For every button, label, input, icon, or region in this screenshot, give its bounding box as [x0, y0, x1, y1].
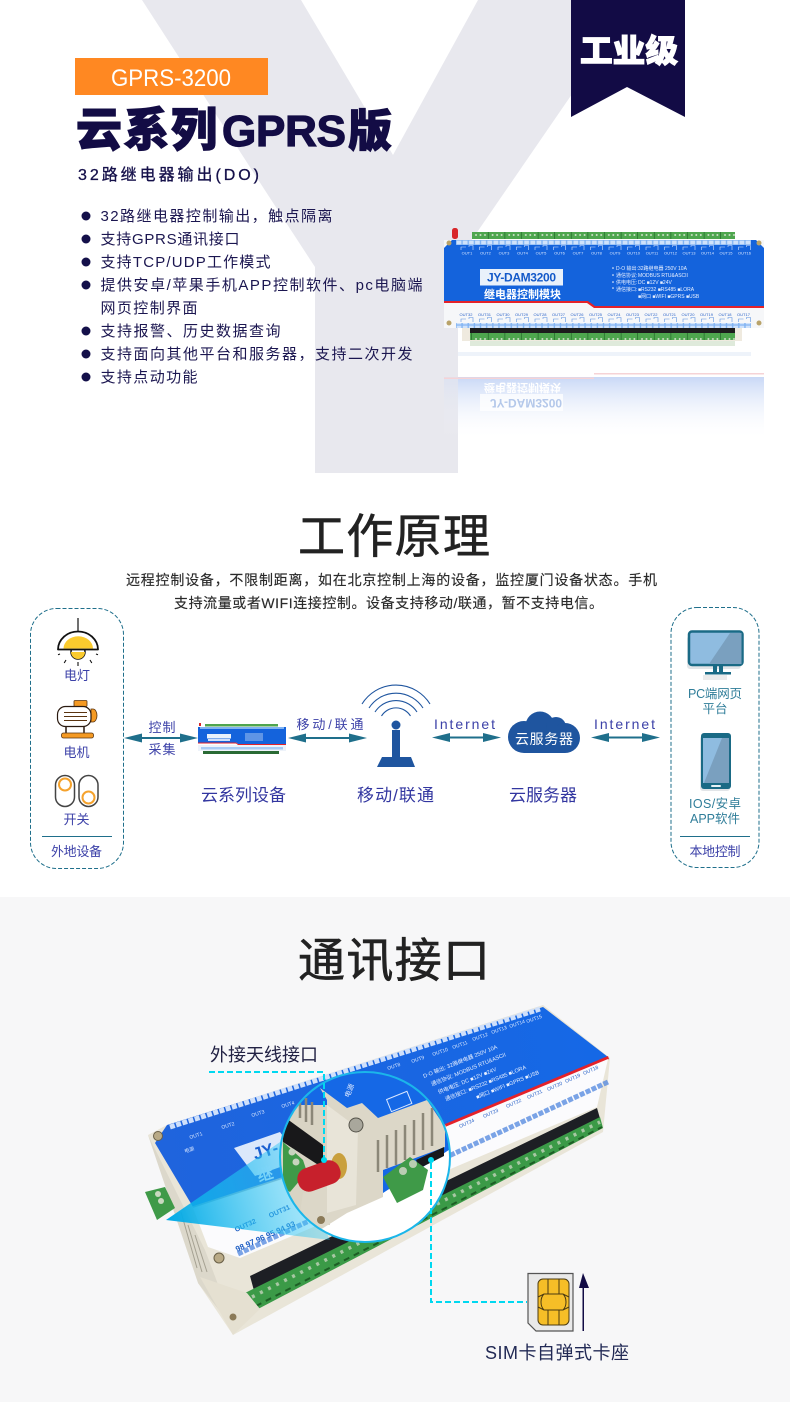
section intro text	[126, 572, 657, 611]
icon: signal tower	[362, 685, 430, 767]
blue top face	[155, 1007, 608, 1207]
section intro text: 支持流量或者WIFI连接控制。设备支持移动/联通，暂不支持电信。	[174, 595, 603, 611]
feature list: 支持报警、历史数据查询	[100, 323, 280, 340]
specification text: D·O 输出:	[616, 265, 638, 272]
name plate: JY-DAM3200	[487, 270, 556, 284]
bottom outputs: OUT32	[460, 312, 473, 317]
bottom outputs	[460, 312, 751, 317]
outputs and spec text: OUT9	[411, 1055, 425, 1065]
name plate	[480, 269, 563, 301]
arrow: control and collect: 控制	[148, 720, 176, 735]
bottom outputs: OUT17	[737, 312, 751, 317]
panel: communication interfaces	[145, 936, 628, 1360]
bottom outputs: OUT24	[608, 312, 621, 317]
mini device image	[198, 723, 286, 754]
outputs and spec text: OUT23	[482, 1108, 500, 1120]
ribbon badge: industrial grade	[571, 0, 685, 117]
outputs and spec text: OUT32	[234, 1218, 258, 1234]
panel caption: 外地设备	[51, 844, 102, 859]
icon: motor	[58, 700, 97, 738]
top outputs: OUT2	[480, 250, 492, 256]
arrow: internet link to clients	[591, 716, 660, 742]
title: 云系列	[76, 104, 217, 156]
bottom outputs: OUT25	[589, 312, 603, 317]
green terminal row	[245, 1117, 603, 1309]
arrow: up	[579, 1273, 589, 1331]
model tag	[75, 58, 268, 95]
outputs and spec text: OUT21	[526, 1089, 544, 1101]
icon: cloud server	[508, 712, 580, 753]
panel: remote devices	[30, 608, 124, 868]
icon: monitor	[687, 632, 742, 680]
top outputs: OUT6	[554, 250, 566, 256]
magnifier lens detail: 电源	[343, 1082, 356, 1099]
feature list: 支持点动功能	[100, 369, 198, 386]
feature list: 支持TCP/UDP工作模式	[100, 254, 270, 271]
feature list: 网页控制界面	[100, 300, 198, 317]
outputs and spec text: 98 97 96 95 94 93	[234, 1219, 297, 1254]
front flange	[200, 1277, 260, 1335]
top outputs: OUT5	[536, 250, 547, 256]
label: PC web platform: 平台	[702, 701, 728, 716]
product reflection: 继电器控制模块	[484, 381, 561, 395]
label: switch: 开关	[63, 812, 90, 827]
outputs and spec text: OUT4	[281, 1100, 296, 1110]
outputs and spec text: OUT18	[582, 1065, 600, 1077]
arrow: mobile/unicom link: 移动/联通	[296, 717, 364, 732]
specification text: MODBUS RTU&ASCII	[638, 273, 688, 279]
top terminal strip	[472, 232, 735, 239]
outputs and spec text: OUT19	[564, 1073, 582, 1085]
label: motor: 电机	[63, 745, 90, 760]
specification text: 32路继电器 250V 10A	[638, 265, 688, 272]
green connector on side	[145, 1187, 175, 1220]
bottom outputs: OUT26	[571, 312, 584, 317]
specification text: 供电电压:	[616, 279, 637, 286]
specification text	[612, 265, 700, 300]
arrow: control and collect	[124, 720, 198, 757]
feature list	[82, 208, 422, 386]
top outputs: OUT11	[646, 250, 659, 256]
icon: phone	[700, 733, 731, 791]
feature list: 支持面向其他平台和服务器，支持二次开发	[100, 346, 412, 363]
bottom outputs: OUT27	[552, 312, 566, 317]
antenna	[452, 228, 458, 239]
side power labels: 电源	[184, 1145, 195, 1155]
arrow: internet link to cloud: Internet	[434, 716, 495, 732]
feature list: 支持GPRS通讯接口	[100, 231, 240, 248]
outputs and spec text: 通信接口: ■RS232 ■RS485 ■LORA	[444, 1063, 527, 1103]
bottom outputs: OUT21	[663, 312, 677, 317]
magnifier lens detail	[280, 1072, 452, 1242]
icon: SIM card	[528, 1274, 573, 1331]
ribbon badge: industrial grade: 工业级	[580, 33, 678, 69]
callout: antenna interface: 外接天线接口	[210, 1045, 318, 1065]
callout: SIM slot	[428, 1157, 629, 1363]
top outputs: OUT15	[720, 250, 733, 256]
outputs and spec text: OUT8	[387, 1062, 401, 1072]
top outputs: OUT8	[591, 250, 603, 256]
left side with vents	[148, 1135, 236, 1332]
panel: local control	[671, 608, 759, 868]
label: PC web platform: PC端网页	[688, 687, 742, 701]
bottom outputs: OUT30	[497, 312, 510, 317]
decorative letter Y backdrop	[142, 0, 636, 473]
specification text: 通信接口:	[616, 286, 637, 293]
label: iOS/Android app: IOS/安卓	[689, 796, 741, 811]
bottom outputs: OUT31	[478, 312, 492, 317]
module white base	[444, 240, 764, 328]
outputs and spec text: OUT24	[458, 1118, 476, 1130]
bottom outputs: OUT18	[719, 312, 732, 317]
red stripe	[445, 1056, 609, 1127]
callout: antenna interface	[209, 1045, 327, 1163]
label: lamp: 电灯	[64, 668, 90, 683]
lower terminals	[462, 328, 742, 341]
bottom outputs: OUT19	[700, 312, 714, 317]
top outputs: OUT10	[627, 250, 641, 256]
bottom outputs: OUT28	[534, 312, 547, 317]
plate and logo fragment	[234, 1132, 300, 1176]
product photo: relay module front view	[444, 228, 764, 341]
outputs and spec text	[189, 1014, 600, 1254]
product reflection: JY-DAM3200	[490, 396, 562, 410]
product photo: relay module perspective: 继	[255, 1163, 275, 1186]
icon: cloud server: 云服务器	[515, 731, 573, 747]
outputs and spec text: ■网口 ■WIFI ■GPRS ■USB	[475, 1069, 541, 1101]
title	[76, 104, 392, 156]
name plate: 继电器控制模块	[484, 287, 561, 301]
outputs and spec text: OUT11	[452, 1040, 469, 1051]
outputs and spec text: OUT31	[268, 1204, 292, 1220]
caption: cloud series device: 云系列设备	[201, 786, 286, 805]
outputs and spec text: OUT15	[526, 1014, 543, 1025]
caption: cloud server: 云服务器	[509, 786, 577, 805]
outputs and spec text: OUT20	[546, 1081, 564, 1093]
white label strip	[193, 1059, 608, 1258]
top outputs: OUT3	[499, 250, 510, 256]
section heading: interfaces: 通讯接口	[298, 934, 490, 987]
icon: switches	[56, 776, 98, 806]
title: GPRS	[222, 107, 346, 156]
outputs and spec text: OUT10	[432, 1047, 449, 1058]
label: PC web platform	[688, 687, 742, 716]
top outputs: OUT16	[738, 250, 752, 256]
red stripe	[444, 301, 764, 308]
title: 版	[348, 107, 392, 156]
outputs and spec text: 供电电压: DC ■12V ■24V	[437, 1065, 498, 1096]
bottom outputs: OUT20	[682, 312, 695, 317]
subtitle: 32路继电器输出(DO)	[78, 166, 259, 184]
top outputs: OUT12	[664, 250, 678, 256]
specification text: DC ■12V ■24V	[638, 280, 672, 286]
arrow: mobile/unicom link	[288, 717, 367, 742]
outputs and spec text: OUT1	[189, 1131, 204, 1141]
caption: mobile/unicom: 移动/联通	[357, 786, 434, 805]
pin labels	[170, 1009, 540, 1127]
product reflection	[444, 341, 764, 440]
top outputs	[462, 250, 752, 256]
outputs and spec text: OUT22	[505, 1098, 523, 1110]
label: iOS/Android app	[689, 796, 741, 826]
outputs and spec text: D·O 输出: 32路继电器 250V 10A	[422, 1043, 499, 1080]
label: SIM slot: SIM卡自弹式卡座	[485, 1343, 629, 1363]
top outputs: OUT1	[462, 250, 473, 256]
mounting screws	[446, 240, 452, 246]
specification text: ■RS232 ■RS485 ■LORA	[638, 287, 695, 293]
top outputs: OUT14	[701, 250, 715, 256]
outputs and spec text: 通信协议: MODBUS RTU&ASCII	[430, 1050, 507, 1088]
module blue face	[444, 240, 764, 307]
outputs and spec text: OUT3	[251, 1109, 266, 1119]
model tag: GPRS-3200	[111, 65, 231, 92]
outputs and spec text: OUT14	[509, 1019, 526, 1030]
magnifier cone	[166, 1140, 330, 1240]
feature list: 提供安卓/苹果手机APP控制软件、pc电脑端	[100, 277, 422, 294]
recess	[250, 1108, 601, 1298]
top outputs: OUT7	[573, 250, 584, 256]
arrow: internet link to cloud	[432, 716, 501, 742]
top outputs: OUT13	[683, 250, 696, 256]
top outputs: OUT9	[610, 250, 621, 256]
top outputs: OUT4	[517, 250, 529, 256]
icon: lamp	[58, 618, 98, 666]
section heading: working principle: 工作原理	[298, 510, 490, 563]
bottom outputs: OUT29	[515, 312, 529, 317]
bottom outputs: OUT22	[645, 312, 658, 317]
specification text: ■网口 ■WIFI ■GPRS ■USB	[638, 294, 700, 300]
arrow: control and collect: 采集	[148, 742, 176, 757]
outputs and spec text: OUT12	[472, 1032, 489, 1043]
label: iOS/Android app: APP软件	[690, 812, 740, 826]
arrow: internet link to clients: Internet	[594, 716, 655, 732]
bottom outputs: OUT23	[626, 312, 640, 317]
product photo: relay module perspective	[145, 1005, 610, 1335]
body	[148, 1005, 610, 1335]
outputs and spec text: OUT2	[221, 1121, 236, 1131]
section intro text: 远程控制设备，不限制距离，如在北京控制上海的设备，监控厦门设备状态。手机	[126, 572, 657, 588]
specification text: 通信协议:	[616, 272, 637, 279]
product photo: relay module perspective: JY-	[251, 1138, 281, 1164]
feature list: 32路继电器控制输出，触点隔离	[100, 208, 332, 225]
panel caption: 本地控制	[690, 844, 740, 859]
outputs and spec text: OUT13	[491, 1025, 508, 1036]
